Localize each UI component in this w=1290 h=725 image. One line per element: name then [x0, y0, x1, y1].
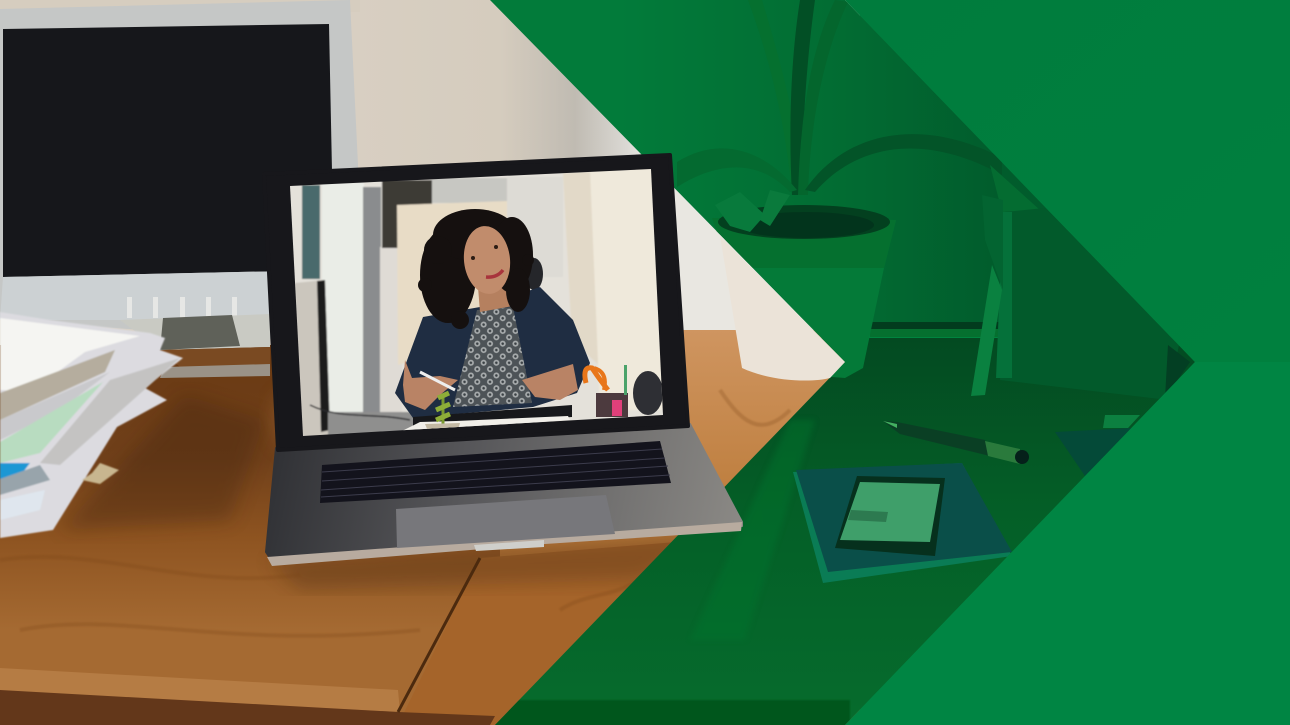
woman neck	[478, 288, 510, 312]
background: wooden desk	[0, 330, 860, 725]
tinted pen	[883, 421, 1029, 464]
tinted plant pot	[712, 190, 896, 378]
tinted picture frame	[971, 165, 1190, 400]
laptop screen	[285, 165, 670, 440]
room background	[285, 165, 670, 440]
tinted desk	[480, 338, 1200, 725]
laptop	[264, 155, 742, 566]
keyboard	[320, 441, 671, 503]
paper scrap	[82, 463, 119, 484]
woman hands	[403, 360, 578, 410]
trackpad	[396, 495, 615, 548]
office chair	[528, 258, 543, 290]
laptop notch	[474, 540, 544, 551]
laptop front edge	[267, 522, 742, 566]
laptop base	[266, 424, 742, 558]
background: office wall	[0, 0, 860, 345]
paper on screen	[403, 416, 570, 430]
keyboard on screen	[413, 405, 572, 427]
desk fan	[633, 371, 663, 415]
tinted notebook	[793, 463, 1012, 583]
tinted phone	[835, 476, 945, 556]
monitor buttons	[127, 297, 237, 318]
laptop lid	[264, 155, 688, 450]
scissors and pen cup	[585, 365, 628, 417]
pen	[420, 372, 455, 390]
woman blouse	[453, 307, 532, 407]
green chevron overlay with tinted scene	[480, 0, 1200, 725]
tinted skirting	[870, 322, 1005, 337]
tinted small card	[1055, 415, 1140, 476]
stack of papers	[0, 312, 183, 538]
woman jacket	[395, 287, 590, 418]
tinted plant leaves	[677, 0, 1002, 195]
solid green right panel	[845, 0, 1290, 725]
monitor stand	[120, 314, 270, 378]
woman face	[464, 226, 510, 294]
untinted pot part	[720, 236, 845, 381]
small plant	[425, 393, 460, 431]
desktop monitor	[0, 0, 358, 378]
woman hair	[418, 209, 534, 329]
tinted wall	[490, 0, 1064, 335]
